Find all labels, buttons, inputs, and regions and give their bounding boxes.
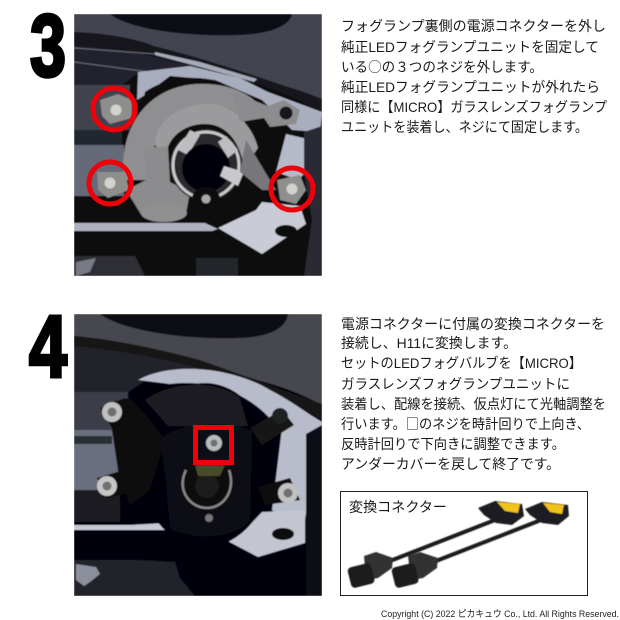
step 3 instructions: ユニットを装着し、ネジにて固定します。 bbox=[341, 119, 588, 135]
step 4 instructions: ガラスレンズフォグランプユニットに bbox=[341, 376, 570, 392]
step 4 instructions: セットのLEDフォグバルブを【MICRO】 bbox=[341, 355, 582, 371]
red circle: lower left screw bbox=[89, 162, 131, 204]
step 3 instructions: フォグランプ裏側の電源コネクターを外し bbox=[341, 18, 606, 34]
step number 4: 4 bbox=[29, 297, 67, 396]
step 4 instructions bbox=[341, 316, 606, 472]
photo: step 4 fog lamp unit with adjustment screw marked bbox=[74, 314, 322, 596]
step 4 instructions: 反時計回りで下向きに調整できます。 bbox=[341, 436, 565, 452]
panel: conversion connector bbox=[340, 492, 588, 596]
connector label: 変換コネクター bbox=[349, 499, 447, 515]
red circle: upper left screw bbox=[93, 88, 135, 130]
connector illustration bbox=[347, 501, 569, 589]
red square: adjustment screw bbox=[196, 428, 232, 462]
step 3 instructions bbox=[341, 18, 607, 135]
step 4 instructions: 行います。□のネジを時計回りで上向き、 bbox=[341, 414, 590, 434]
step 4 instructions: アンダーカバーを戻して終了です。 bbox=[341, 456, 560, 472]
step 3 instructions: 純正LEDフォグランプユニットを固定して bbox=[341, 39, 599, 55]
step 3 instructions: 同様に【MICRO】ガラスレンズフォグランプ bbox=[341, 99, 607, 115]
step 3 instructions: 純正LEDフォグランプユニットが外れたら bbox=[341, 79, 600, 95]
step 4 instructions: 接続し、H11に変換します。 bbox=[341, 335, 517, 351]
photo: step 3 fog lamp unit with screws circled bbox=[74, 14, 322, 276]
step 4 instructions: 装着し、配線を接続、仮点灯にて光軸調整を bbox=[341, 396, 606, 412]
red circle: right screw bbox=[271, 168, 313, 210]
step 4 instructions: 電源コネクターに付属の変換コネクターを bbox=[341, 316, 605, 332]
step 3 instructions: いる○の３つのネジを外します。 bbox=[341, 57, 543, 77]
